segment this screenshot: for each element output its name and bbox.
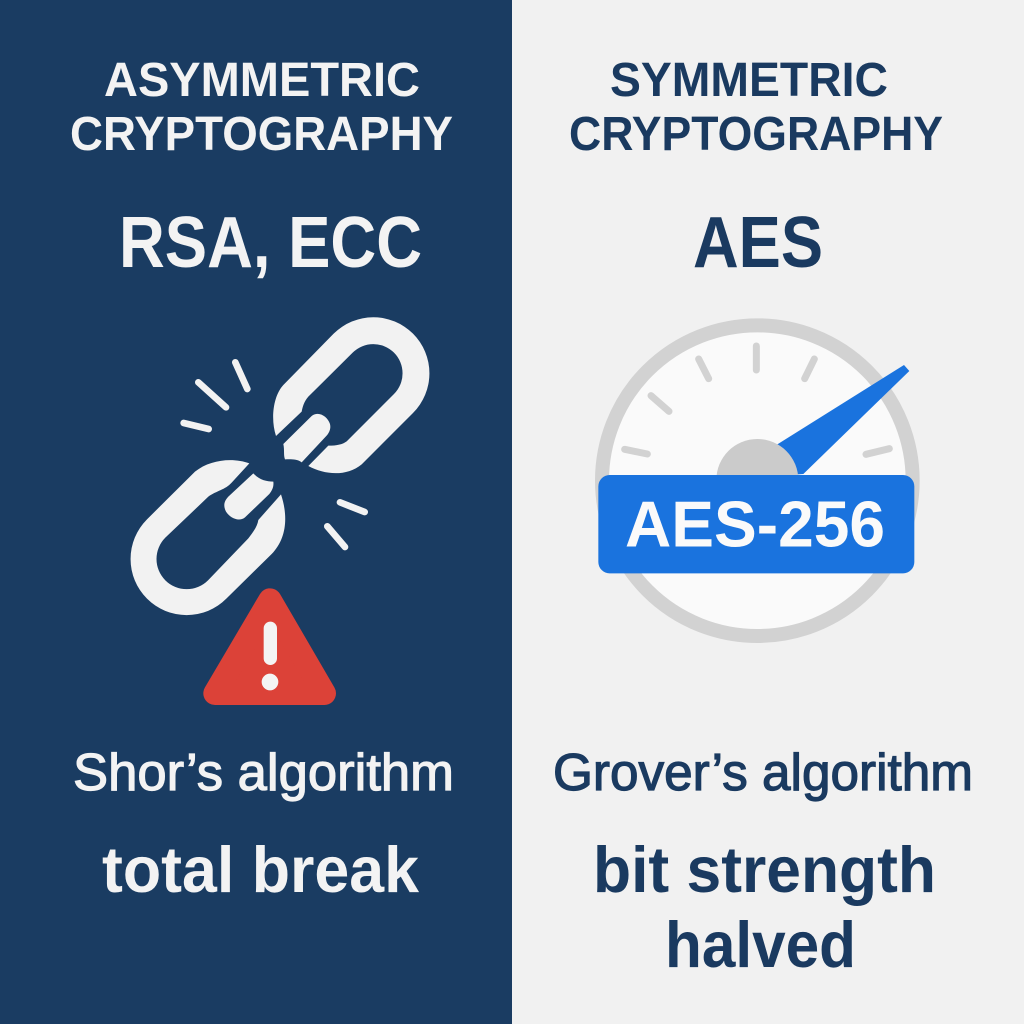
subheading: AES: AES	[693, 203, 823, 283]
upper link tongue	[283, 414, 330, 462]
result: bit strength halved: bit strength	[593, 833, 936, 906]
lower link tongue	[224, 473, 273, 519]
heading: asymmetric cryptography: CRYPTOGRAPHY	[70, 108, 453, 161]
heading: symmetric cryptography: SYMMETRIC	[610, 54, 888, 107]
badge: AES-256	[598, 475, 914, 573]
heading: asymmetric cryptography: ASYMMETRIC	[104, 54, 420, 107]
icon: warning triangle	[215, 600, 324, 693]
lower link	[131, 460, 285, 615]
icon: strength gauge	[598, 325, 914, 636]
gauge needle	[767, 365, 909, 477]
label: Grover's algorithm: Grover’s algorithm	[553, 744, 973, 802]
gauge ticks	[625, 346, 889, 454]
panel: symmetric cryptography	[512, 0, 1024, 1024]
upper link	[273, 317, 429, 473]
icon: broken chain link	[131, 317, 429, 615]
panel: asymmetric cryptography	[0, 0, 512, 1024]
gauge hub	[716, 439, 798, 521]
result: bit strength halved	[593, 833, 936, 981]
sparks	[184, 362, 365, 547]
heading: symmetric cryptography: CRYPTOGRAPHY	[569, 108, 943, 161]
result: bit strength halved: halved	[665, 908, 856, 981]
result: total break: total break	[102, 833, 420, 906]
gauge dial	[602, 325, 913, 636]
badge: AES-256: AES-256	[625, 488, 885, 561]
subheading: RSA, ECC: RSA, ECC	[119, 203, 422, 283]
label: Shor's algorithm: Shor’s algorithm	[73, 744, 454, 802]
heading: asymmetric cryptography	[70, 54, 453, 161]
heading: symmetric cryptography	[569, 54, 943, 161]
